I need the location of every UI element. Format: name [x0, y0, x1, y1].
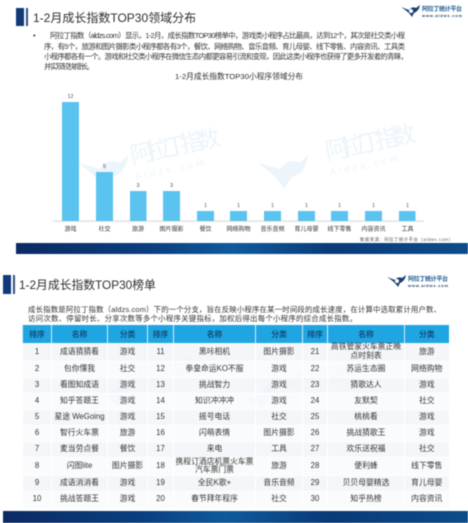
table: top 30 ranking: 游戏 — [419, 380, 435, 389]
logo: top: www.aldwx.com — [421, 13, 462, 18]
source note: 数据来源：阿拉丁统计平台（aldwx.com） — [360, 236, 453, 243]
table: top 30 ranking: 知识冲冲冲 — [195, 396, 234, 405]
chart: bar chart of categories: 社交 — [98, 225, 111, 233]
table: top 30 ranking: 名称 — [207, 330, 222, 338]
table: top 30 ranking: 游戏 — [419, 428, 435, 437]
table: top 30 ranking: 旅游 — [419, 346, 435, 356]
text block: definition: 访问次数、停留时长、分享次数等多个小程序关键指标，加权后得出每个小程序的综合成长指数。 — [28, 314, 357, 323]
table: top 30 ranking: 春节拜年程序 — [191, 494, 238, 503]
panel: bottom slide — [2, 274, 449, 323]
table: top 30 ranking: 16 — [156, 428, 165, 437]
table: top 30 ranking: 工具 — [271, 444, 287, 453]
table: top 30 ranking: 名称 — [72, 330, 87, 338]
table: top 30 ranking: 11 — [156, 346, 165, 356]
chart: bar chart of categories: 工具 — [401, 226, 414, 233]
table: top 30 ranking: 成语消消看 — [60, 478, 99, 487]
chart: bar chart of categories: 游戏 — [64, 225, 77, 233]
table: top 30 ranking: 全民K歌+ — [198, 478, 231, 487]
table: top 30 ranking: 知乎热榜 — [350, 494, 382, 503]
table: top 30 ranking: 分类 — [271, 330, 287, 338]
table: top 30 ranking: 社交 — [419, 444, 435, 453]
table: top 30 ranking: 猜歌达人 — [350, 380, 382, 389]
table: top 30 ranking: 摇号电话 — [199, 412, 230, 421]
chart: bar chart of categories: 1 — [305, 203, 308, 209]
table: top 30 ranking: 30 — [311, 494, 319, 503]
table: top 30 ranking: 便利蜂 — [354, 461, 378, 470]
table: top 30 ranking: 线下零售 — [411, 461, 442, 470]
table: top 30 ranking: 知乎答题王 — [60, 396, 99, 405]
table: top 30 ranking: 21 — [311, 346, 319, 356]
text block: definition — [28, 305, 441, 323]
table: top 30 ranking: 图片摄影 — [263, 428, 295, 437]
chart: bar chart of categories: 图片摄影 — [159, 225, 184, 233]
footer band: bottom slide — [3, 511, 468, 523]
chart: bar chart of categories: 3 — [170, 183, 173, 189]
table: top 30 ranking: 游戏 — [120, 478, 135, 487]
table: top 30 ranking: 社交 — [120, 364, 135, 373]
table: top 30 ranking: 10 — [33, 494, 41, 503]
table: top 30 ranking: 23 — [311, 380, 319, 389]
chart: bar chart of categories: 12 — [67, 94, 74, 100]
table: top 30 ranking: 餐饮 — [120, 444, 135, 453]
table: top 30 ranking: 游戏 — [271, 364, 287, 373]
table: top 30 ranking: 高铁管家火车票正晚点时刻表 — [331, 342, 401, 360]
text block: summary: 并实现较快增长。 — [44, 62, 94, 71]
table: top 30 ranking: 游戏 — [120, 396, 135, 405]
watermarks and logos: Aldzs.com — [328, 154, 399, 179]
table: top 30 ranking: 挑战智力 — [199, 380, 230, 389]
watermarks and logos: 阿拉丁指数 — [281, 359, 356, 397]
text block: summary: 小程序都各有一个。游戏和社交类小程序在微信生态内都更容易引流和变现，因此这类小程序也获得了更多开发者的青睐， — [44, 52, 408, 61]
table: top 30 ranking: 看图知成语 — [60, 380, 99, 389]
table: top 30 ranking: 13 — [156, 380, 165, 389]
table: top 30 ranking: 名称 — [358, 330, 374, 338]
table: top 30 ranking: 内容资讯 — [411, 494, 442, 503]
table: top 30 ranking: 22 — [311, 364, 319, 373]
chart: bar chart of categories: 网络购物 — [226, 225, 251, 233]
table: top 30 ranking: 游戏 — [120, 412, 135, 421]
table: top 30 ranking: 5 — [35, 412, 39, 421]
table: top 30 ranking: 7 — [35, 444, 39, 453]
chart: bar chart of categories: 5 — [103, 164, 106, 170]
table: top 30 ranking: 星途 WeGoing — [54, 412, 105, 421]
table: top 30 ranking: 网络购物 — [411, 364, 442, 373]
chart: bar chart of categories: 1 — [271, 203, 274, 209]
table: top 30 ranking: 成语猜猜看 — [60, 346, 99, 356]
chart: bar chart of categories: 1 — [338, 203, 341, 209]
table: top 30 ranking: 黑咔相机 — [199, 346, 230, 356]
chart: bar chart of categories: 内容资讯 — [361, 225, 386, 233]
table: top 30 ranking: 18 — [156, 461, 165, 470]
table: top 30 ranking: 欢乐送祝福 — [346, 444, 385, 453]
table: top 30 ranking: 14 — [156, 396, 165, 405]
logo: bottom — [387, 274, 449, 288]
table: top 30 ranking: 游戏 — [120, 380, 135, 389]
chart title: 1-2月成长指数TOP30小程序领域分布 — [175, 71, 303, 81]
heading: field distribution — [15, 7, 196, 27]
table: top 30 ranking: 游戏 — [120, 494, 135, 503]
chart: bar chart of categories: 1 — [372, 203, 375, 209]
table: top 30 ranking: 排序 — [29, 330, 45, 338]
table: top 30 ranking: 19 — [156, 478, 165, 487]
table: top 30 ranking: 闪萌表情 — [199, 428, 230, 437]
table: top 30 ranking: 20 — [156, 494, 165, 503]
table: top 30 ranking: 分类 — [120, 330, 135, 338]
table: top 30 ranking: 旅游 — [271, 461, 287, 470]
table: top 30 ranking: 分类 — [419, 330, 435, 338]
table: top 30 ranking: 24 — [311, 396, 319, 405]
table: top 30 ranking: 4 — [35, 396, 39, 405]
table: top 30 ranking: 包你懂我 — [64, 364, 95, 373]
watermarks and logos: 阿拉丁指数 — [323, 120, 418, 166]
table: top 30 ranking: 音乐音频 — [263, 478, 295, 487]
table: top 30 ranking: 拳皇命运KO不服 — [185, 364, 244, 373]
table: top 30 ranking: 17 — [156, 444, 165, 453]
text block: summary: • — [33, 31, 36, 40]
table: top 30 ranking: 25 — [311, 412, 319, 421]
table: top 30 ranking: 友默契 — [354, 396, 378, 405]
table: top 30 ranking: 12 — [156, 364, 165, 373]
heading: ranking: 1-2月成长指数TOP30榜单 — [19, 278, 156, 292]
text block: summary — [32, 30, 408, 71]
logo: bottom: www.aldwx.com — [407, 283, 448, 288]
table: top 30 ranking: 智行火车票 — [60, 428, 99, 437]
chart: bar chart of categories: 音乐音频 — [260, 225, 285, 233]
text block: summary: 序，有5个，旅游和图片摄影类小程序都各有3个，餐饮、网络购物、音乐音频、育儿母婴、线下零售、内容资讯、工具类 — [44, 42, 406, 51]
table: top 30 ranking: 社交 — [419, 396, 435, 405]
table: top 30 ranking — [22, 324, 450, 503]
table: top 30 ranking: 图片摄影 — [263, 346, 295, 356]
table: top 30 ranking: 2 — [35, 364, 39, 373]
table: top 30 ranking: 挑战猜歌王 — [346, 428, 385, 437]
table: top 30 ranking: 桃桃看 — [354, 412, 378, 421]
table: top 30 ranking: 闪图lite — [67, 461, 92, 470]
table: top 30 ranking: 排序 — [307, 330, 323, 338]
logo: bottom: 阿拉丁统计平台 — [408, 275, 448, 283]
table: top 30 ranking: 挑战答题王 — [60, 494, 99, 503]
table: top 30 ranking: 29 — [311, 478, 319, 487]
watermarks and logos: 阿拉丁指数 — [128, 124, 223, 170]
table: top 30 ranking: 游戏 — [271, 396, 287, 405]
logo: top — [401, 4, 463, 18]
chart: bar chart of categories: 育儿母婴 — [294, 225, 319, 233]
chart: bar chart of categories: 旅游 — [132, 225, 144, 233]
watermarks and logos: 阿拉丁指数 — [121, 353, 196, 391]
table: top 30 ranking: 27 — [311, 444, 319, 453]
table: top 30 ranking: 贝贝母婴精选 — [343, 478, 389, 487]
table: top 30 ranking: 携程订酒店机票火车票汽车票门票 — [176, 456, 253, 474]
table: top 30 ranking: 麦当劳点餐 — [60, 444, 99, 453]
chart: bar chart of categories: 线下零售 — [327, 225, 352, 233]
watermarks and logos: Aldzs.com — [134, 158, 205, 183]
table: top 30 ranking: 来电 — [207, 444, 222, 453]
text block: definition: 成长指数是阿拉丁指数（aldzs.com）下的一个分支，旨在反映小程序在某一时间段的成长速度，在计算中选取累计用户数、 — [28, 305, 441, 314]
table: top 30 ranking: 8 — [35, 461, 39, 470]
chart: bar chart of categories: 1 — [204, 203, 207, 209]
chart: bar chart of categories — [53, 71, 453, 243]
chart: bar chart of categories: 1 — [406, 203, 409, 209]
table: top 30 ranking: 旅游 — [120, 428, 135, 437]
table: top 30 ranking: 社交 — [271, 494, 287, 503]
footer band: top slide — [16, 243, 468, 254]
chart: bar chart of categories: 3 — [136, 183, 140, 189]
heading: field distribution: 1-2月成长指数TOP30领域分布 — [33, 11, 196, 25]
table: top 30 ranking: 游戏 — [120, 346, 135, 356]
table: top 30 ranking: 1 — [35, 346, 39, 356]
logo: top: 阿拉丁统计平台 — [422, 5, 462, 13]
chart: bar chart of categories: 餐饮 — [199, 225, 212, 233]
table: top 30 ranking: 社交 — [271, 412, 287, 421]
table: top 30 ranking: 15 — [156, 412, 165, 421]
table: top 30 ranking: 图片摄影 — [112, 461, 143, 470]
text block: summary: 阿拉丁指数（aldzs.com）显示，1-2月，成长指数TOP30榜单中，游戏类小程序占比最高，达到12个，其次是社交类小程 — [50, 31, 406, 40]
heading: ranking — [2, 274, 156, 295]
table: top 30 ranking: 9 — [35, 478, 39, 487]
table: top 30 ranking: 排序 — [153, 330, 168, 338]
table: top 30 ranking: 游戏 — [419, 412, 435, 421]
table: top 30 ranking: 6 — [35, 428, 39, 437]
table: top 30 ranking: 育儿母婴 — [411, 478, 442, 487]
table: top 30 ranking: 苏运生态圈 — [346, 364, 385, 373]
chart: bar chart of categories: 1 — [237, 203, 240, 209]
table: top 30 ranking: 游戏 — [271, 380, 287, 389]
table: top 30 ranking: 26 — [311, 428, 319, 437]
table: top 30 ranking: 3 — [35, 380, 39, 389]
panel: top slide — [15, 4, 468, 255]
table: top 30 ranking: 28 — [311, 461, 319, 470]
